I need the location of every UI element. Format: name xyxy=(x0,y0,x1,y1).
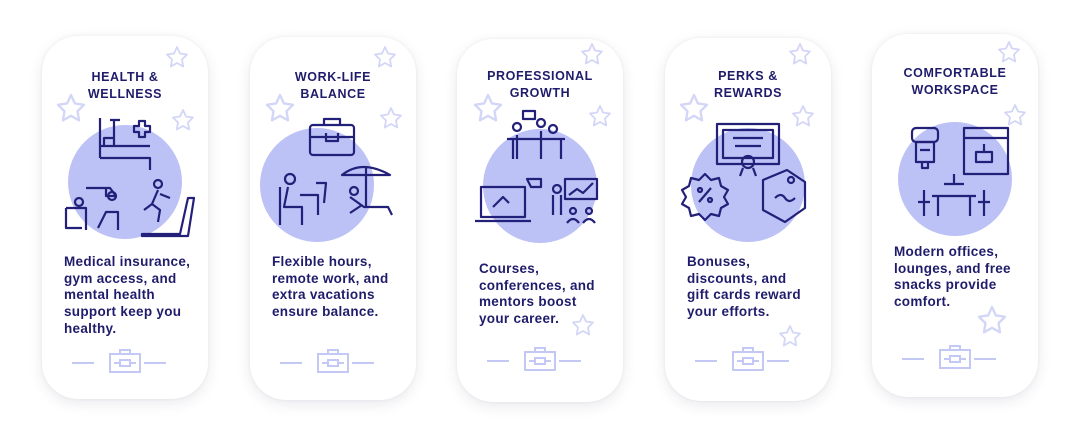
circle backdrop xyxy=(691,128,805,242)
description: mentors boost xyxy=(479,294,577,309)
footer briefcase xyxy=(695,347,789,371)
description: healthy. xyxy=(64,321,116,336)
icon: medical scene xyxy=(64,118,196,238)
card: professional growth xyxy=(457,39,623,402)
description: discounts, and xyxy=(687,271,786,286)
footer briefcase xyxy=(72,349,166,373)
description: Modern offices, xyxy=(894,244,998,259)
heading: HEALTH & xyxy=(91,70,159,84)
heading: BALANCE xyxy=(300,87,366,101)
description xyxy=(272,254,389,319)
heading: PROFESSIONAL xyxy=(487,69,593,83)
description: support keep you xyxy=(64,304,181,319)
card: perks & rewards xyxy=(665,38,831,401)
heading: WORK-LIFE xyxy=(295,70,371,84)
description: remote work, and xyxy=(272,271,389,286)
description xyxy=(64,254,190,336)
description: gym access, and xyxy=(64,271,177,286)
description: lounges, and free xyxy=(894,261,1011,276)
icon: meeting and training xyxy=(475,110,598,224)
footer briefcase xyxy=(902,345,996,369)
description: conferences, and xyxy=(479,278,595,293)
heading: REWARDS xyxy=(714,86,782,100)
description: Courses, xyxy=(479,261,539,276)
description: gift cards reward xyxy=(687,287,801,302)
description: mental health xyxy=(64,287,155,302)
description xyxy=(894,244,1011,309)
heading: COMFORTABLE xyxy=(904,66,1006,80)
heading xyxy=(904,66,1006,97)
heading: WELLNESS xyxy=(88,87,162,101)
heading: GROWTH xyxy=(510,86,570,100)
description: comfort. xyxy=(894,294,950,309)
heading xyxy=(88,70,162,101)
circle backdrop xyxy=(483,129,597,243)
circle backdrop xyxy=(260,128,374,242)
description: Bonuses, xyxy=(687,254,750,269)
description: extra vacations xyxy=(272,287,375,302)
footer briefcase xyxy=(487,347,581,371)
icon: cooler, coffee machine, table xyxy=(910,126,1010,216)
description: your efforts. xyxy=(687,304,770,319)
description xyxy=(687,254,801,319)
icon: certificate, badges and tag xyxy=(680,122,806,224)
card: comfortable workspace xyxy=(872,34,1038,397)
heading xyxy=(487,69,593,100)
description: your career. xyxy=(479,311,559,326)
heading xyxy=(714,69,782,100)
description xyxy=(479,261,595,326)
description: Flexible hours, xyxy=(272,254,372,269)
heading xyxy=(294,70,371,101)
footer briefcase xyxy=(280,349,374,373)
heading: WORKSPACE xyxy=(911,83,999,97)
description: snacks provide xyxy=(894,277,996,292)
card: health & wellness xyxy=(42,36,208,399)
card: work-life balance xyxy=(250,37,416,400)
circle backdrop xyxy=(898,122,1012,236)
heading: PERKS & xyxy=(718,69,778,83)
description: ensure balance. xyxy=(272,304,379,319)
description: Medical insurance, xyxy=(64,254,190,269)
circle backdrop xyxy=(68,125,182,239)
icon: office and beach xyxy=(278,118,393,225)
